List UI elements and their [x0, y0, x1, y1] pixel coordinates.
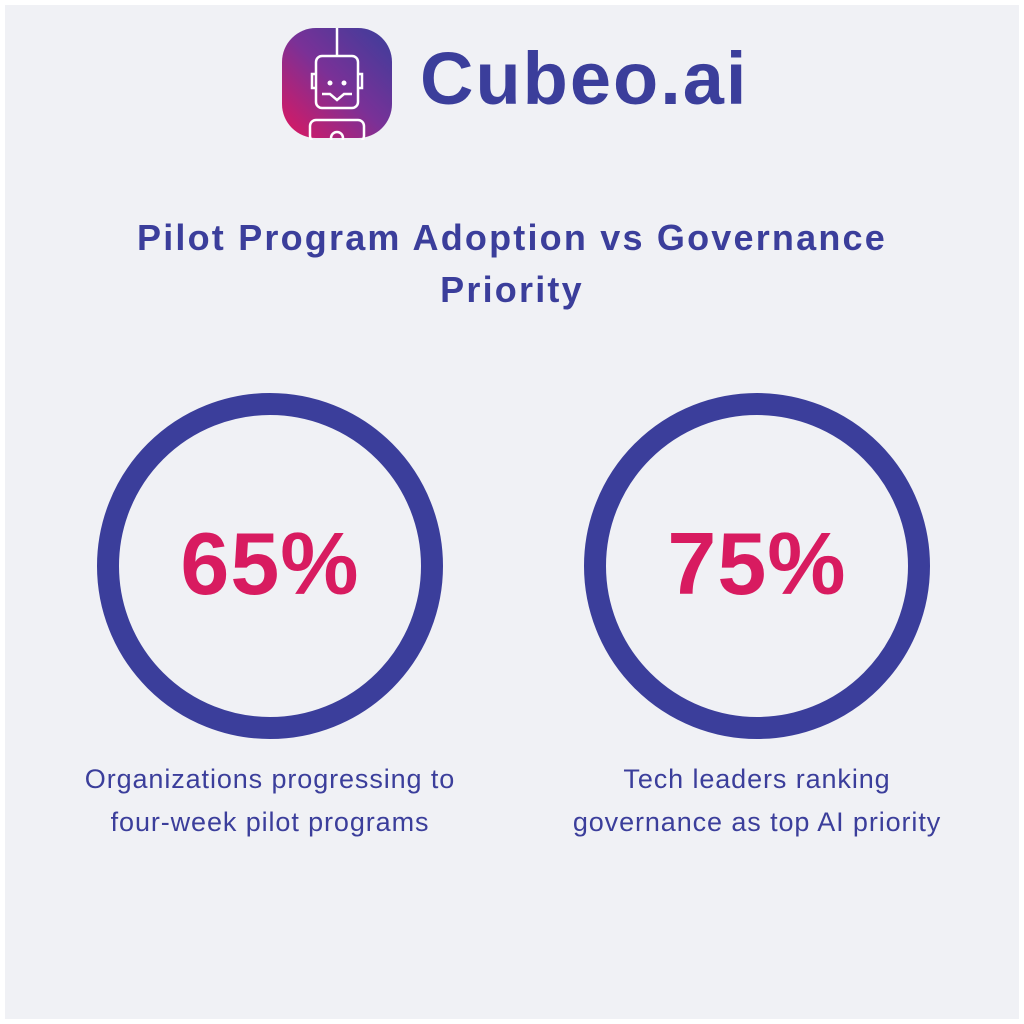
label right [573, 764, 941, 837]
brand name: Cubeo.ai [420, 37, 748, 120]
ring [97, 393, 443, 739]
number: 65% [180, 514, 360, 613]
label left: four-week pilot programs [111, 807, 429, 837]
number: 75% [667, 514, 847, 613]
stat: 65% [97, 393, 443, 739]
title: Pilot Program Adoption vs Governance [137, 217, 887, 258]
logo [282, 28, 748, 140]
label left [85, 764, 455, 837]
label right: Tech leaders ranking [623, 764, 891, 794]
label right: governance as top AI priority [573, 807, 941, 837]
stat: 75% [584, 393, 930, 739]
label left: Organizations progressing to [85, 764, 455, 794]
ring [584, 393, 930, 739]
icon: robot [282, 28, 392, 140]
title [137, 217, 887, 310]
title: Priority [440, 269, 584, 310]
